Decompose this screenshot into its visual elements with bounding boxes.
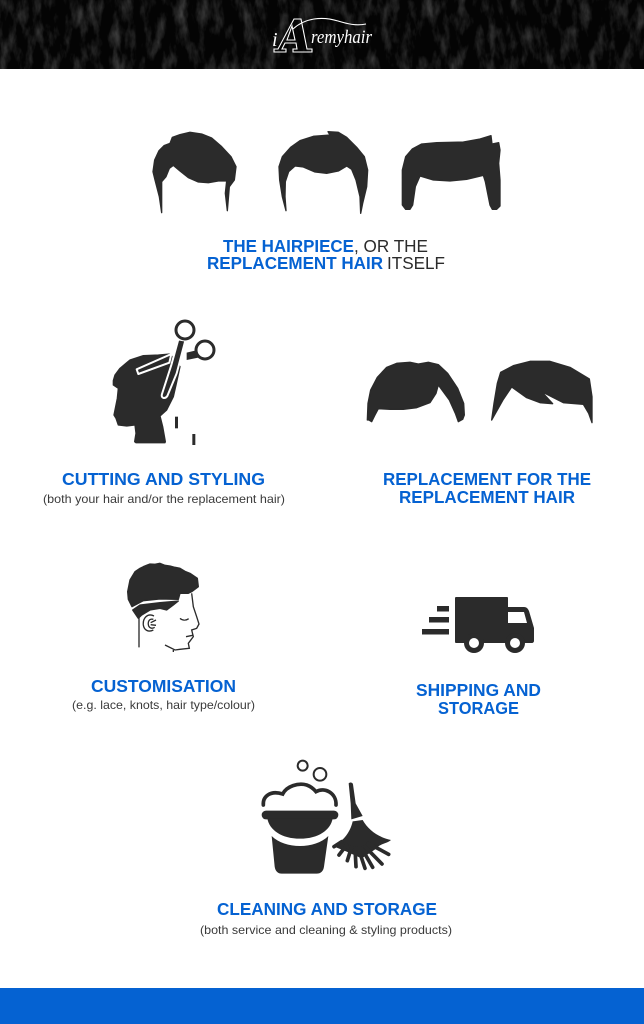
icon: head with styled hair xyxy=(128,563,199,652)
heading: cutting and styling: CUTTING AND STYLING xyxy=(62,469,265,489)
icon: head with scissors xyxy=(113,321,214,445)
heading: customisation: CUSTOMISATION xyxy=(91,676,236,696)
logo: remyhair xyxy=(311,27,373,48)
icon: replacement hair B xyxy=(492,361,592,423)
subtext: customisation: (e.g. lace, knots, hair type/colour) xyxy=(72,698,255,712)
heading: shipping: SHIPPING AND xyxy=(416,680,541,700)
icon: hairpieces row xyxy=(153,132,500,213)
heading: hairpiece: REPLACEMENT HAIR xyxy=(207,253,383,273)
heading: hairpiece: ITSELF xyxy=(387,253,445,273)
icon: bucket and duster xyxy=(262,761,391,874)
heading: cleaning: CLEANING AND STORAGE xyxy=(217,899,437,919)
icon: hairpiece 1 xyxy=(153,132,236,213)
heading: hairpiece xyxy=(207,236,445,273)
icon: delivery truck xyxy=(422,597,534,653)
subtext: cleaning: (both service and cleaning & styling products) xyxy=(200,923,452,937)
icon: hairpiece 3 xyxy=(402,136,500,209)
footer band xyxy=(0,988,644,1024)
heading: hairpiece: THE HAIRPIECE xyxy=(223,236,354,256)
heading: replacement xyxy=(383,469,591,507)
icon: replacement hairs xyxy=(367,361,592,423)
icon: hairpiece 2 xyxy=(279,132,368,213)
heading: replacement: REPLACEMENT FOR THE xyxy=(383,469,591,489)
icon: replacement hair A xyxy=(367,362,464,422)
logo: i xyxy=(272,29,278,51)
heading: shipping: STORAGE xyxy=(438,698,519,718)
heading: shipping xyxy=(416,680,541,718)
header band xyxy=(0,0,644,69)
logo xyxy=(272,18,373,52)
heading: replacement: REPLACEMENT HAIR xyxy=(399,487,575,507)
subtext: cutting: (both your hair and/or the replacement hair) xyxy=(43,492,285,506)
heading: hairpiece: , OR THE xyxy=(354,236,428,256)
